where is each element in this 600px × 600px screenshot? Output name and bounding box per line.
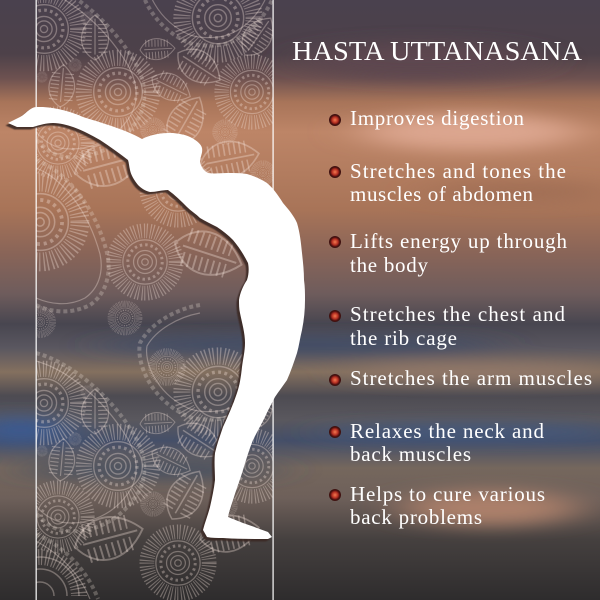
benefit: back problems: Helps to cure various — [350, 482, 545, 506]
benefit: back problems — [329, 482, 545, 529]
benefit: chest — [329, 302, 566, 350]
benefit: abdomen — [329, 159, 566, 206]
benefit: energy: the body — [350, 253, 428, 277]
silhouette shadow — [6, 110, 302, 542]
benefit: abdomen: Stretches and tones the — [350, 159, 566, 183]
benefit: abdomen: muscles of abdomen — [350, 182, 534, 206]
benefit: neck and back — [329, 419, 544, 466]
benefit: energy — [329, 229, 568, 277]
benefit: chest: Stretches the chest and — [350, 302, 566, 326]
benefit: energy: Lifts energy up through — [350, 229, 568, 253]
panel: paisley mandala pattern — [36, 0, 273, 600]
benefit: chest: the rib cage — [350, 326, 457, 350]
benefit: neck and back: Relaxes the neck and — [350, 419, 544, 443]
benefit: neck and back: back muscles — [350, 442, 471, 466]
panel border lines — [36, 0, 274, 600]
benefit: arms: Stretches the arm muscles — [350, 366, 592, 390]
benefit list — [329, 106, 592, 529]
pattern repeat: lower — [36, 300, 273, 600]
pattern repeat: upper — [36, 0, 273, 314]
silhouette: standing backbend figure — [8, 107, 305, 539]
title: HASTA UTTANASANA — [292, 36, 583, 66]
benefit: digestion: Improves digestion — [350, 106, 524, 130]
benefit: back problems: back problems — [350, 505, 482, 529]
